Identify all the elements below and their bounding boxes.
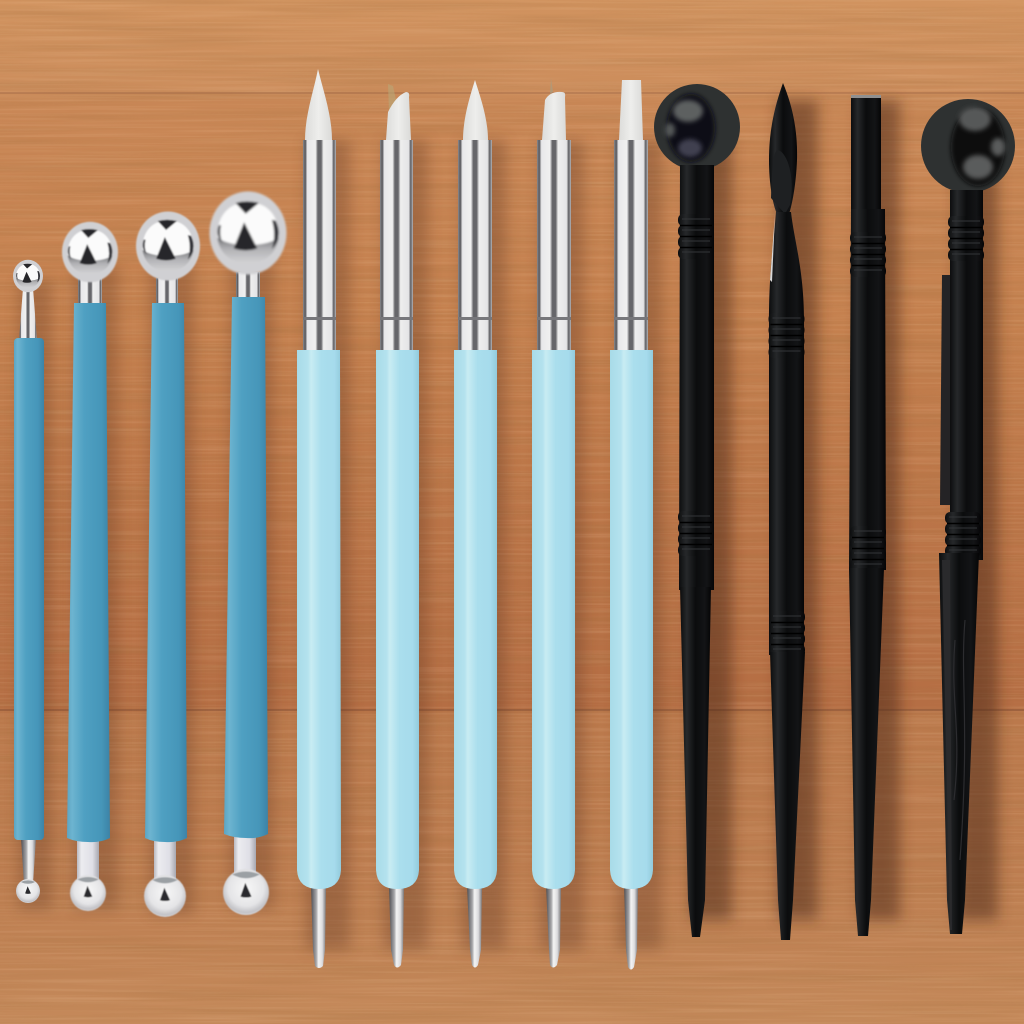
group: pale blue silicone tip tools: [297, 69, 662, 970]
tool: extra large ball stylus: [210, 191, 286, 915]
tool: small ball stylus: [13, 260, 52, 910]
tool: large black ball tool: [921, 99, 1015, 934]
tool: pointed silicone tip 2: [454, 80, 506, 968]
tool: black blade tool: [768, 83, 818, 940]
group: blue ball stylus tools: [13, 191, 286, 917]
tool: flat silicone tip: [610, 80, 662, 970]
tool: medium ball stylus: [62, 222, 118, 911]
tool: pointed silicone tip: [297, 69, 350, 968]
tool: black ball tool: [654, 84, 740, 937]
tool: slanted silicone tip: [376, 84, 428, 968]
tool: large ball stylus: [136, 211, 200, 917]
tool: slanted silicone tip 2: [532, 78, 584, 968]
group: black sculpting tools: [654, 83, 1015, 940]
tool: black flat tool: [849, 95, 900, 936]
